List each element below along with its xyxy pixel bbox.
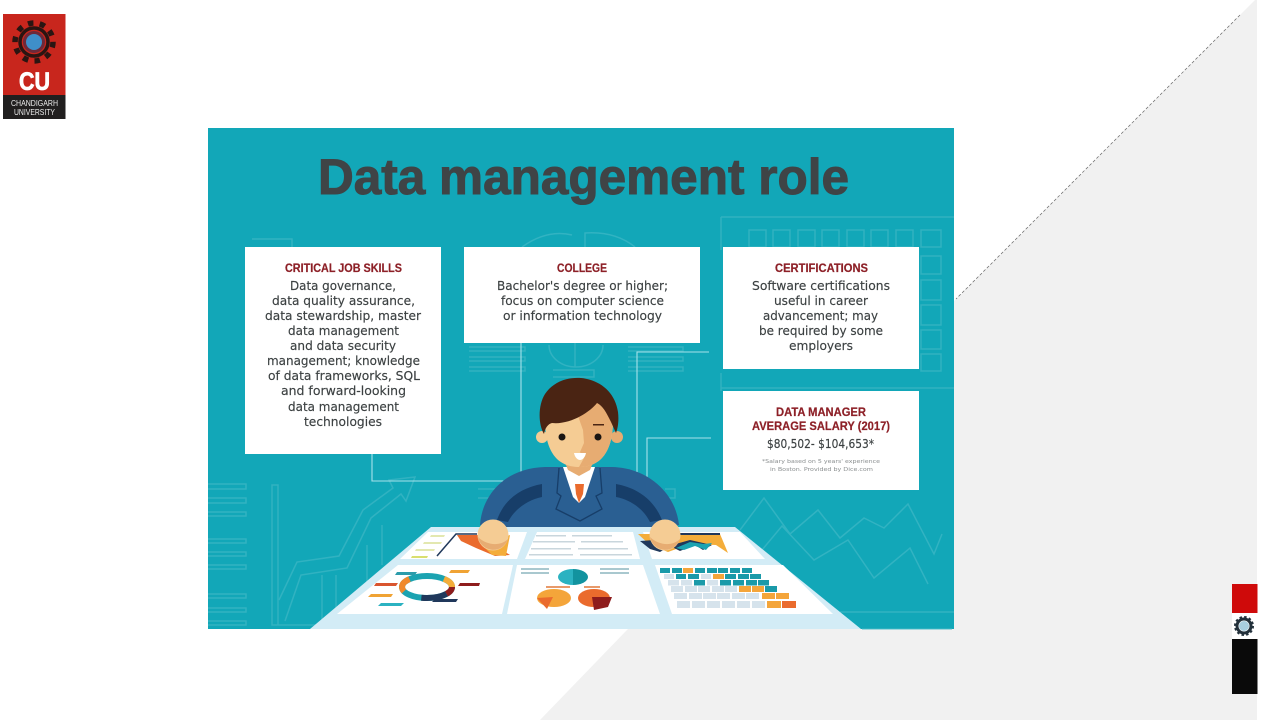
faint background line art [208, 217, 954, 629]
ears [536, 431, 548, 443]
body text: critical job skills: and forward-looking [281, 384, 406, 398]
hands [478, 520, 680, 550]
donut legend bars [368, 570, 480, 606]
heading: average salary: AVERAGE SALARY (2017) [752, 421, 890, 433]
body text: critical job skills: data management [288, 400, 399, 414]
heatmap orange cells [683, 568, 789, 608]
face [545, 400, 613, 467]
side tab: red block [1232, 584, 1258, 613]
heading: certifications: CERTIFICATIONS [775, 263, 868, 275]
inner arm shadows [497, 484, 662, 522]
body text: critical job skills: and data security [290, 339, 396, 353]
body text: certifications: be required by some [759, 324, 883, 338]
dashboard table [310, 527, 861, 629]
salary footnote: in Boston. Provided by Dice.com [770, 467, 873, 473]
body text: college: Bachelor's degree or higher; [497, 279, 668, 293]
side tab: black block [1232, 639, 1258, 694]
face shaded half [578, 400, 613, 467]
tie [575, 484, 584, 503]
top left sheet: line chart [400, 532, 527, 559]
body text: college: focus on computer science [501, 294, 664, 308]
suit and arms [480, 467, 679, 528]
body text: critical job skills: Data governance, [290, 279, 396, 293]
neck [564, 460, 594, 476]
heading: college: COLLEGE [557, 263, 607, 275]
body text: critical job skills: of data frameworks, SQL [268, 369, 420, 383]
salary range: $80,502- $104,653* [767, 437, 874, 451]
heading: average salary: DATA MANAGER [776, 407, 867, 419]
jacket lapels [556, 468, 602, 521]
body text: critical job skills: management; knowledge [267, 354, 420, 368]
heading: critical job skills: CRITICAL JOB SKILLS [285, 263, 402, 275]
bottom left sheet: donut chart [337, 565, 513, 614]
card: average salary [723, 391, 919, 490]
top centre sheet: text lines [525, 532, 640, 559]
top right sheet: area chart [638, 532, 765, 559]
body text: certifications: employers [789, 339, 853, 353]
illustration: person [480, 378, 679, 528]
bottom centre sheet: pie charts [507, 565, 660, 614]
donut [402, 576, 452, 598]
body text: critical job skills: data stewardship, master [265, 309, 421, 323]
body text: college: or information technology [503, 309, 662, 323]
logo university name: UNIVERSITY [14, 108, 56, 117]
heatmap grey cells [664, 574, 765, 608]
body text: certifications: advancement; may [763, 309, 878, 323]
logo letters: CU [19, 68, 50, 96]
body text: certifications: useful in career [774, 294, 868, 308]
title: Data management role [318, 149, 849, 205]
infographic panel [208, 128, 954, 629]
card: certifications [723, 247, 919, 369]
body text: critical job skills: data management [288, 324, 399, 338]
heatmap teal cells [660, 568, 777, 592]
logo emblem [15, 23, 53, 61]
logo: Chandigarh University [3, 14, 66, 119]
hair [540, 378, 618, 434]
connector lines with dots [372, 343, 711, 482]
side tab: emblem background and emblem [1232, 613, 1258, 639]
bottom right sheet: heatmap [655, 565, 833, 614]
heatmap dark orange cell [782, 601, 796, 608]
card: critical job skills [245, 247, 441, 454]
card: college [464, 247, 700, 343]
body text: critical job skills: data quality assurance, [272, 294, 415, 308]
logo university name: CHANDIGARH [11, 99, 58, 108]
salary footnote: *Salary based on 5 years' experience [762, 459, 881, 465]
smile [574, 453, 586, 460]
body text: critical job skills: technologies [304, 415, 382, 429]
shirt [563, 467, 595, 503]
eyes [558, 434, 566, 440]
body text: certifications: Software certifications [752, 279, 890, 293]
eyebrow [593, 424, 604, 426]
background: grey diagonal shape [540, 0, 1257, 720]
